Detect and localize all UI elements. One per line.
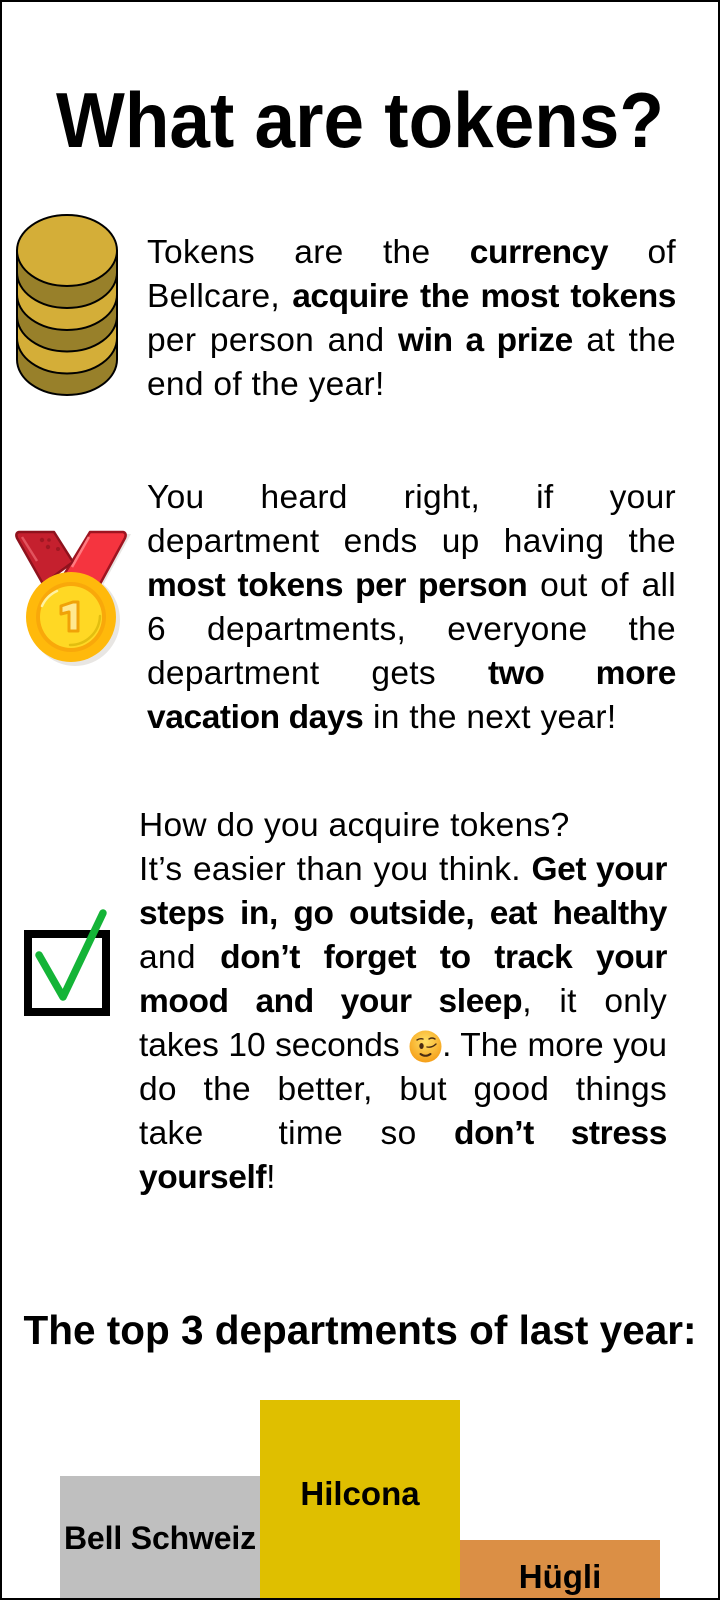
text block: how to acquire tokens: How do you acquire tokens? [139,807,570,844]
icon: gold medal [15,530,131,666]
title: What are tokens? [56,76,664,164]
text block: how to acquire tokens [139,807,668,1196]
text block: department prize: most tokens per person out of all [147,567,676,604]
text block: department prize: vacation days in the next year! [147,699,616,736]
text block: how to acquire tokens: takes 10 seconds . The more you [139,1027,667,1064]
icon: stack of gold coins [16,214,118,396]
bar chart: top 3 departments [60,1400,660,1598]
text block: how to acquire tokens: do the better, but good things [139,1071,667,1108]
text block: department prize: department ends up having the [147,523,676,560]
text block: how to acquire tokens: mood and your sleep, it only [139,983,667,1020]
text block: tokens are the currency: Bellcare, acquire the most tokens [147,278,676,315]
bar: Hügli: Hügli [519,1558,601,1595]
bar: Hilcona: Hilcona [300,1475,420,1512]
bar: Bell Schweiz [60,1476,260,1598]
heading: top 3 departments: The top 3 departments of last year: [23,1307,697,1353]
text block: tokens are the currency: end of the year! [147,366,385,403]
bar: Hügli [460,1540,660,1598]
bar: Bell Schweiz: Bell Schweiz [64,1520,256,1556]
text block: department prize: department gets two more [147,655,676,692]
text block: tokens are the currency: per person and win a prize at the [147,322,676,359]
text block: how to acquire tokens: yourself! [139,1159,276,1196]
text block: tokens are the currency: Tokens are the currency of [147,234,676,271]
bar: Hilcona [260,1400,460,1598]
text block: how to acquire tokens: steps in, go outside, eat healthy [139,895,667,932]
text block: how to acquire tokens: It’s easier than you think. Get your [139,851,667,888]
icon: check box [24,909,110,1016]
text block: department prize: 6 departments, everyone the [147,611,676,648]
text block: how to acquire tokens: and don’t forget to track your [139,939,667,976]
text block: tokens are the currency [147,234,676,403]
text block: department prize [147,479,676,736]
text block: how to acquire tokens: take time so don’t stress [139,1115,667,1152]
text block: department prize: You heard right, if your [147,479,676,516]
